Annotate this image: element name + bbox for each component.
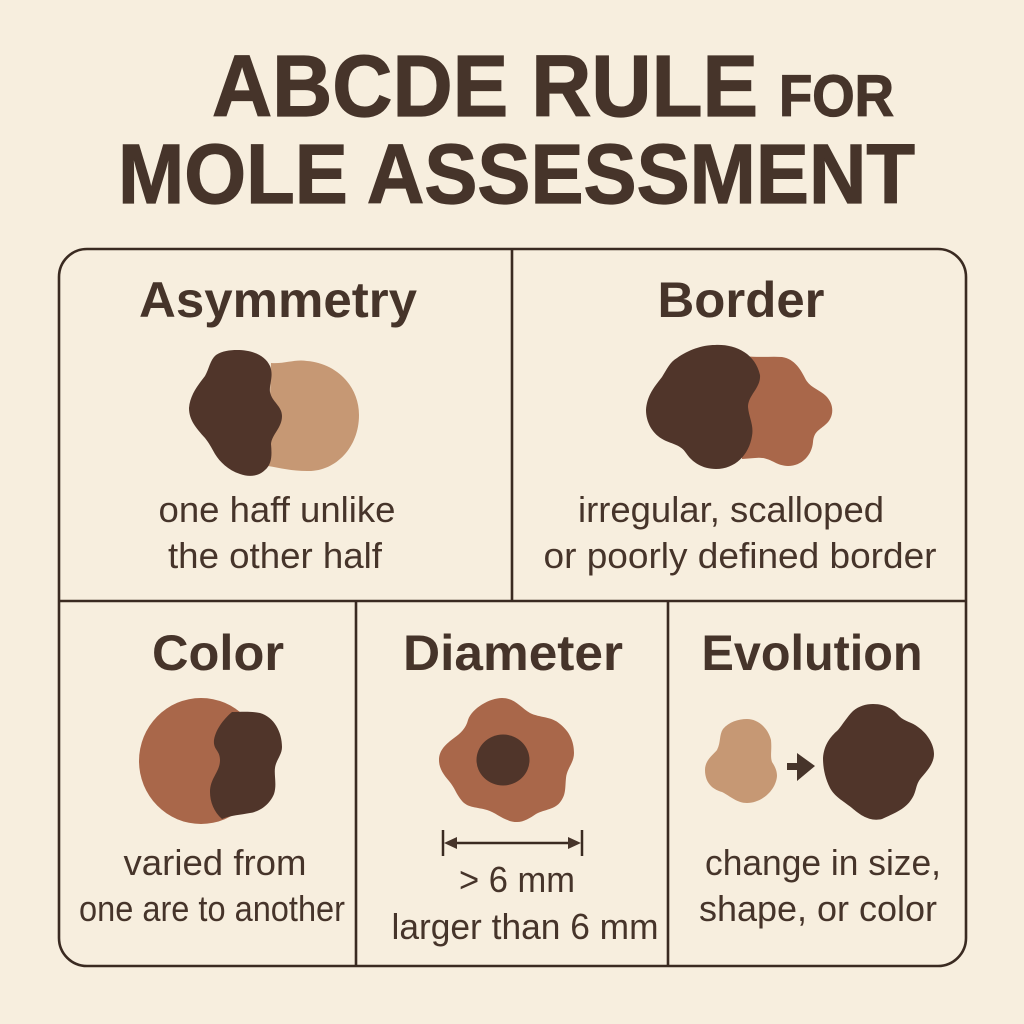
caption: color: varied from bbox=[124, 842, 306, 883]
icon: varied color mole bbox=[139, 698, 282, 824]
caption: evolution: shape, or color bbox=[699, 888, 937, 929]
panel: asymmetry bbox=[139, 272, 417, 576]
icon: arrow bbox=[787, 753, 815, 781]
heading: diameter: Diameter bbox=[403, 625, 623, 681]
title: ABCDE RULE bbox=[212, 38, 758, 135]
icon: measure arrow bbox=[443, 830, 582, 856]
caption: border bbox=[544, 489, 936, 576]
caption: diameter: > 6 mm bbox=[459, 859, 575, 900]
title bbox=[118, 38, 915, 221]
caption: diameter bbox=[392, 859, 658, 947]
icon: irregular border mole bbox=[646, 345, 832, 469]
panel: color bbox=[79, 625, 345, 929]
title: MOLE ASSESSMENT bbox=[118, 127, 915, 221]
panel: diameter bbox=[392, 625, 658, 947]
panel grid frame bbox=[59, 249, 966, 966]
heading: asymmetry: Asymmetry bbox=[139, 272, 417, 328]
caption: asymmetry: the other half bbox=[168, 535, 383, 576]
panel: evolution bbox=[699, 625, 941, 929]
icon: mole with dark center bbox=[439, 698, 574, 822]
heading: evolution: Evolution bbox=[702, 625, 922, 681]
caption: asymmetry: one haff unlike bbox=[158, 489, 396, 530]
caption: evolution: change in size, bbox=[705, 842, 941, 883]
heading: border: Border bbox=[658, 272, 824, 328]
caption: border: irregular, scalloped bbox=[578, 489, 884, 530]
caption: evolution bbox=[699, 842, 941, 929]
icon: asymmetric mole bbox=[189, 350, 359, 476]
icon: small mole bbox=[705, 719, 777, 803]
caption: diameter: larger than 6 mm bbox=[392, 906, 658, 947]
caption: color bbox=[79, 842, 345, 929]
heading: color: Color bbox=[152, 625, 284, 681]
title: FOR bbox=[779, 64, 894, 129]
caption: border: or poorly defined border bbox=[544, 535, 936, 576]
icon: large dark mole bbox=[823, 704, 934, 820]
caption: color: one are to another bbox=[79, 888, 345, 929]
panel: border bbox=[544, 272, 936, 576]
caption: asymmetry bbox=[158, 489, 396, 576]
